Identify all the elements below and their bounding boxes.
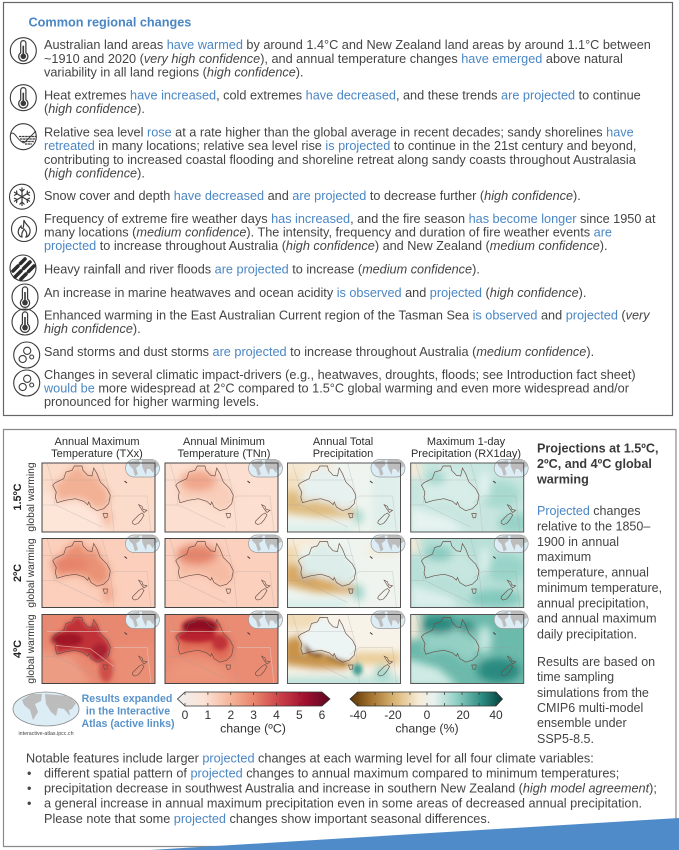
text: results basis: ensemble under	[537, 716, 627, 730]
text: impact drivers: would be more widespread at 2°C compared to 1.5°C global warming and even more widespread and/or	[43, 382, 630, 396]
text: enhanced warming	[44, 308, 650, 336]
column titles: Annual Total	[313, 436, 373, 448]
text: notable features: Notable features include larger projected changes at each warming level for all four climate variables:	[26, 752, 594, 766]
colorbar: precipitation: 40	[489, 708, 503, 722]
text: notable features: •	[27, 766, 31, 780]
text: notable features	[26, 752, 657, 826]
text: impact drivers: pronounced for higher warming levels.	[44, 395, 259, 409]
colorbar: precipitation: 20	[456, 708, 470, 722]
panel: common regional changes	[4, 2, 672, 416]
text: notable features: different spatial pattern of projected changes to annual maximum compared to minimum temperatures;	[44, 766, 619, 780]
colorbar: precipitation: -40	[349, 708, 367, 722]
text: notable features: a general increase in annual maximum precipitation even in some areas of decreased annual precipitation.	[44, 796, 642, 810]
link text: results expanded: Atlas (active links)	[81, 718, 175, 730]
text: marine heatwaves: An increase in marine heatwaves and ocean acidity is observed and projected (high confidence).	[44, 286, 586, 300]
colorbar: precipitation	[349, 692, 503, 736]
colorbar: precipitation: -20	[384, 708, 402, 722]
heading: projections: Projections at 1.5ºC,	[537, 442, 658, 456]
text: heavy rainfall: Heavy rainfall and river floods are projected to increase (medium confidence).	[44, 262, 480, 276]
icon: heavy rainfall	[10, 255, 36, 281]
map: TXx 2C	[42, 535, 160, 608]
text: projected changes	[537, 504, 662, 642]
link text: results expanded	[81, 693, 175, 730]
decorative footer wedge	[150, 818, 679, 850]
caption: atlas url: interactive-atlas.ipcc.ch	[18, 731, 74, 737]
text: enhanced warming: high confidence).	[44, 322, 141, 336]
link text: results expanded: in the Interactive	[86, 706, 170, 718]
text: land warming: variability in all land regions (high confidence).	[44, 66, 304, 80]
text: projected changes: annual precipitation,	[537, 596, 649, 610]
colorbar: temperature: change (ºC)	[220, 722, 286, 736]
link text: results expanded: Results expanded	[82, 693, 172, 705]
row labels: 1.5ºC	[12, 483, 24, 511]
colorbar: temperature: 2	[227, 708, 234, 722]
text: results basis: time sampling	[537, 670, 614, 684]
text: projected changes: temperature, annual	[537, 566, 649, 580]
text: sea level: Relative sea level rose at a rate higher than the global average in recent decades; sandy shorelines have	[44, 126, 634, 140]
map: RX1day 1.5C	[406, 458, 534, 533]
text: sea level: (high confidence).	[44, 166, 145, 180]
text: land warming: ~1910 and 2020 (very high confidence), and annual temperature changes have emerged above natural	[44, 52, 623, 66]
text: fire weather	[44, 212, 656, 253]
row labels: global warming	[26, 462, 37, 532]
heading: projections: warming	[536, 472, 589, 486]
column titles: Annual Maximum	[55, 436, 139, 448]
icon: impact drivers	[14, 370, 40, 396]
colorbar: temperature: 1	[205, 708, 212, 722]
text: heat extremes: Heat extremes have increased, cold extremes have decreased, and these trends are projected to continue	[44, 88, 641, 102]
icon: thermometer current	[12, 309, 38, 335]
text: results basis	[537, 655, 655, 746]
colorbar: temperature: 6	[319, 708, 326, 722]
column titles: Precipitation	[313, 448, 373, 460]
map: precipitation 4C	[282, 610, 405, 688]
map: TNn 2C	[165, 535, 282, 608]
text: fire weather: projected to increase throughout Australia (high confidence) and New Zealand (medium confidence).	[44, 239, 608, 253]
colorbar: temperature	[178, 692, 330, 736]
column titles: Annual Minimum	[183, 436, 265, 448]
text: sea level: retreated in many locations; relative sea level rise is projected to continue in the 21st century and beyond,	[44, 139, 636, 153]
row labels: global warming	[26, 538, 37, 608]
row labels: 2ºC	[12, 564, 24, 582]
text: land warming: Australian land areas have warmed by around 1.4°C and New Zealand land areas by around 1.1°C between	[44, 38, 651, 52]
text: notable features: •	[27, 782, 31, 796]
text: sand storms: Sand storms and dust storms are projected to increase throughout Australia (medium confidence).	[44, 345, 594, 359]
map: RX1day 4C	[406, 610, 528, 686]
text: snow: Snow cover and depth have decreased and are projected to decrease further (high confidence).	[44, 189, 581, 203]
icon: snowflake	[10, 184, 34, 209]
text: fire weather: many locations (medium confidence). The intensity, frequency and duration of fire weather events are	[44, 226, 612, 240]
column titles	[51, 436, 521, 460]
text: projected changes: Projected changes	[537, 504, 641, 518]
map: precipitation 2C	[282, 534, 405, 612]
text: heat extremes: (high confidence).	[44, 102, 145, 116]
heading: projections: 2ºC, and 4ºC global	[537, 457, 652, 471]
panel: projections frame	[4, 430, 676, 846]
text: projected changes: and annual maximum	[537, 612, 657, 626]
heading: projections	[536, 442, 658, 486]
text: results basis: Results are based on	[537, 655, 655, 669]
map: precipitation 1.5C	[282, 458, 405, 537]
colorbar: precipitation: 0	[424, 708, 431, 722]
column titles: Temperature (TXx)	[51, 448, 143, 460]
text: notable features: •	[27, 796, 31, 810]
text: projected changes: minimum temperature,	[537, 581, 662, 595]
text: fire weather: Frequency of extreme fire weather days has increased, and the fire season has become longer since 1950 at	[44, 212, 656, 226]
colorbar: precipitation: change (%)	[395, 722, 459, 736]
text: projected changes: 1900 in annual	[537, 535, 619, 549]
text: enhanced warming: Enhanced warming in the East Australian Current region of the Tasman Sea is observed and projected (very	[44, 308, 650, 322]
text: sea level	[44, 126, 637, 180]
text: notable features: Please note that some projected changes show important seasonal differences.	[44, 812, 490, 826]
colorbar: temperature: 4	[273, 708, 280, 722]
column titles: Precipitation (RX1day)	[411, 448, 521, 460]
icon: sand storms	[14, 342, 40, 368]
text: results basis: CMIP6 multi-model	[537, 701, 643, 715]
map: TNn 4C	[160, 611, 282, 684]
text: impact drivers: Changes in several climatic impact-drivers (e.g., heatwaves, droughts, floods; see Introduction fact sheet)	[44, 368, 636, 382]
text: projected changes: daily precipitation.	[537, 628, 637, 642]
icon: sea level	[10, 124, 36, 150]
text: sea level: contributing to increased coastal flooding and shoreline retreat along sandy coasts throughout Australasia	[44, 153, 637, 167]
icon: thermometer heat extremes	[10, 85, 36, 111]
icon: interactive atlas globe	[13, 692, 79, 737]
icon: thermometer marine	[12, 284, 38, 310]
row labels: 4ºC	[12, 640, 24, 658]
text: land warming	[44, 38, 651, 80]
map: TXx 4C	[37, 611, 160, 690]
colorbar: temperature: 5	[296, 708, 303, 722]
text: results basis: SSP5-8.5.	[537, 732, 594, 746]
row labels	[12, 462, 37, 684]
map: RX1day 2C	[406, 534, 528, 608]
text: projected changes: relative to the 1850–	[537, 520, 650, 534]
icon: thermometer warming	[10, 38, 36, 64]
colorbar: temperature: 3	[250, 708, 257, 722]
heading: common regional changes: Common regional changes	[28, 16, 191, 30]
map: TXx 1.5C	[37, 460, 160, 538]
text: impact drivers	[43, 368, 636, 409]
text: heat extremes	[44, 88, 641, 116]
column titles: Maximum 1-day	[427, 436, 506, 448]
column titles: Temperature (TNn)	[178, 448, 270, 460]
text: notable features: precipitation decrease in southwest Australia and increase in southern New Zealand (high model agreement);	[44, 782, 657, 796]
icon: fire	[12, 216, 36, 242]
text: projected changes: maximum	[537, 550, 591, 564]
map: TNn 1.5C	[165, 460, 282, 532]
text: results basis: simulations from the	[537, 686, 649, 700]
colorbar: temperature: 0	[182, 708, 189, 722]
row labels: global warming	[26, 614, 37, 684]
